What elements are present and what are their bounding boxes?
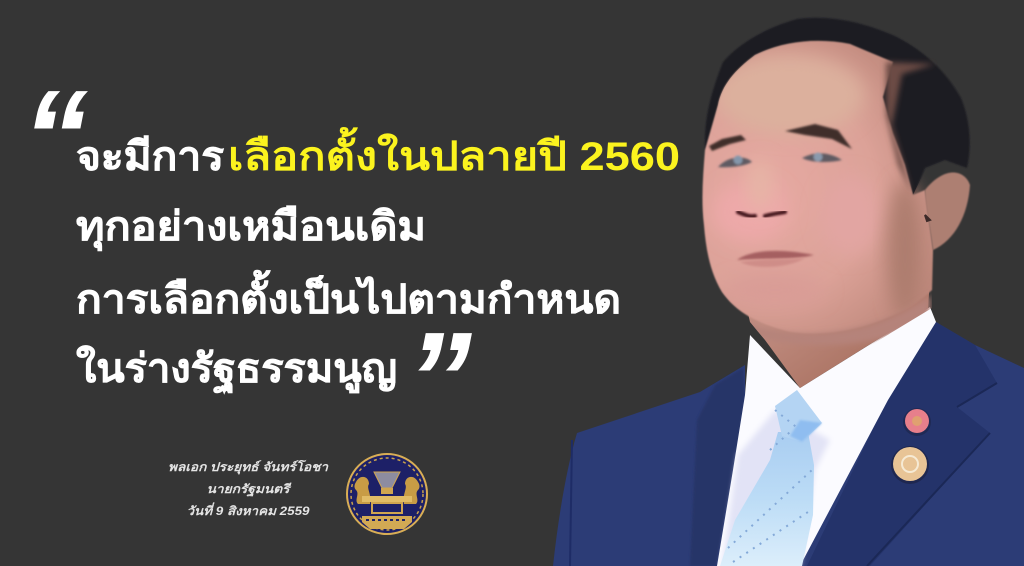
role: นายกรัฐมนตรี xyxy=(206,482,292,497)
icon: government emblem xyxy=(347,454,427,534)
eyes xyxy=(718,152,842,167)
jaw blend xyxy=(745,295,930,345)
opening quote mark: “ xyxy=(22,63,88,210)
line 4: ในร่างรัฐธรรมนูญ xyxy=(76,345,397,395)
mouth xyxy=(737,251,814,260)
hair xyxy=(705,18,970,197)
closing quote mark: ” xyxy=(406,305,472,452)
jacket xyxy=(553,322,1024,566)
nose xyxy=(738,212,785,216)
temple shading xyxy=(886,62,935,193)
line 1 xyxy=(76,127,680,179)
line 1: จะมีการ xyxy=(76,135,225,179)
lapel pin: pink xyxy=(903,408,931,436)
line 3: การเลือกตั้งเป็นไปตามกำหนด xyxy=(76,270,621,322)
shirt xyxy=(717,307,936,566)
eyebrows xyxy=(709,124,852,151)
neck xyxy=(745,250,932,388)
date: วันที่ 9 สิงหาคม 2559 xyxy=(186,502,310,518)
attribution xyxy=(168,459,329,518)
line 2: ทุกอย่างเหมือนเดิม xyxy=(76,205,426,252)
headline quote xyxy=(76,127,680,395)
line 1: เลือกตั้งในปลายปี 2560 xyxy=(228,127,680,179)
ear xyxy=(925,172,970,250)
portrait photo xyxy=(553,18,1024,566)
tie xyxy=(720,390,822,566)
name: พลเอก ประยุทธ์ จันทร์โอชา xyxy=(168,459,329,475)
face xyxy=(702,41,970,345)
lapel pin: gold xyxy=(891,446,929,484)
